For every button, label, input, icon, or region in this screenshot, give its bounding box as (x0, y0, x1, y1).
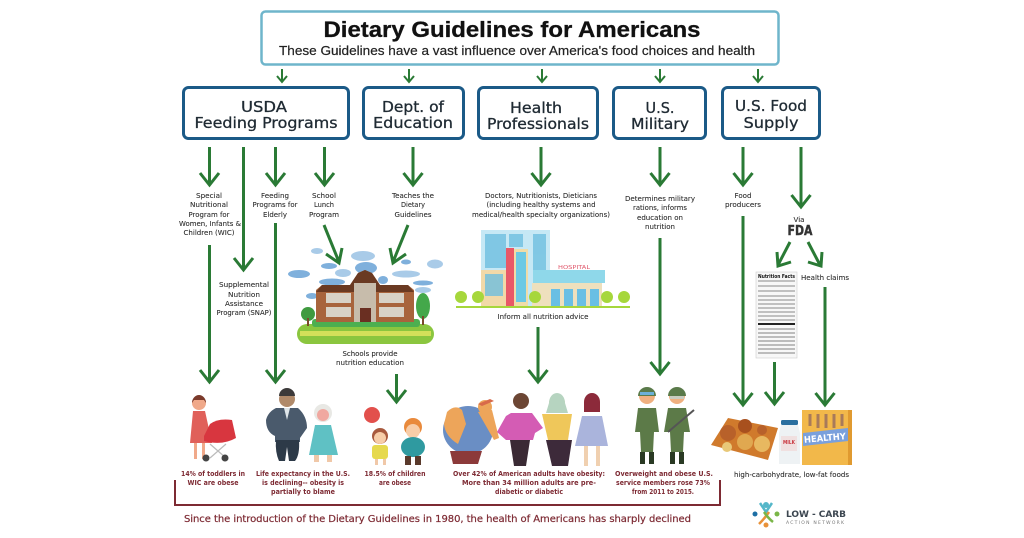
caption: life expectancy: partially to blame (271, 488, 335, 496)
logo: Low-Carb Action Network: LOW - CARB (786, 510, 846, 520)
box: USDA Feeding Programs: Feeding Programs (194, 114, 338, 132)
subtitle: These Guidelines have a vast influence over America's food choices and health (279, 43, 755, 58)
text: food producers (725, 192, 761, 209)
text: SNAP: Supplemental (219, 281, 269, 289)
text: SNAP: Nutrition (228, 291, 260, 299)
caption: service members: from 2011 to 2015. (632, 488, 694, 496)
clouds (288, 248, 443, 299)
text: elderly programs: Feeding (261, 192, 289, 200)
building (316, 270, 414, 322)
text: SNAP (216, 281, 272, 317)
box: U.S. Food Supply: U.S. Food (735, 97, 807, 115)
text: military: education on (637, 214, 683, 222)
text: schools provide: nutrition education (336, 359, 404, 367)
box: USDA Feeding Programs: USDA (241, 98, 288, 116)
text: SNAP: Assistance (225, 300, 263, 308)
box: U.S. Military (614, 88, 706, 138)
text: WIC (179, 192, 242, 237)
caption: adults: More than 34 million adults are pre- (462, 479, 596, 487)
text: WIC: Special (196, 192, 222, 200)
bracket: conclusion (175, 480, 720, 505)
caption: adults: Over 42% of American adults have obesity: (453, 470, 605, 478)
box: USDA Feeding Programs (184, 88, 348, 138)
caption: life expectancy (256, 470, 350, 496)
caption: adults (453, 470, 605, 496)
lawn (297, 324, 434, 344)
icon: mother with stroller (190, 395, 236, 462)
icon: hospital illustration (455, 230, 630, 308)
caption: children: 18.5% of children (364, 470, 426, 478)
caption: children (364, 470, 426, 487)
caption: life expectancy: Life expectancy in the U.S. (256, 470, 350, 478)
text: school lunch (309, 192, 339, 219)
caption: children: are obese (379, 479, 411, 487)
logo: Low-Carb Action Network: ACTION NETWORK (786, 520, 845, 526)
arrows: first level (200, 147, 810, 270)
text: military: rations, informs (633, 204, 687, 212)
text: high-carbohydrate foods: high-carbohydrate, low-fat foods (734, 471, 849, 479)
text: doctors: medical/health specialty organizations) (472, 211, 610, 219)
text: inform all nutrition advice: Inform all nutrition advice (498, 313, 588, 321)
text: elderly programs (252, 192, 298, 219)
caption: toddlers (181, 470, 245, 487)
text: school lunch: Lunch (314, 201, 334, 209)
icon: FDA logo: FDA (788, 224, 812, 239)
box: U.S. Food Supply: Supply (744, 114, 799, 132)
text: food producers: producers (725, 201, 761, 209)
text: schools provide: Schools provide (342, 350, 398, 358)
box: Dept. of Education: Dept. of (382, 98, 445, 116)
text: food producers: Food (734, 192, 752, 200)
icon: food tray, milk and cereal box (711, 410, 852, 465)
title: Dietary Guidelines for Americans (324, 17, 700, 42)
text: WIC: Nutritional (190, 201, 228, 209)
icon: children with balloon (364, 407, 425, 465)
text: elderly programs: Elderly (263, 211, 287, 219)
caption: service members: service members rose 73% (616, 479, 710, 487)
text: elderly programs: Programs for (252, 201, 298, 209)
logo: Low-Carb Action Network (752, 502, 846, 528)
text: via: Via (794, 216, 804, 224)
icon: soldiers (635, 387, 694, 464)
text: conclusion: Since the introduction of the Dietary Guidelines in 1980, the health of Americans has sharply declined (184, 514, 691, 525)
box: U.S. Food Supply (722, 88, 820, 138)
icon: adults with obesity (443, 393, 608, 466)
arrows: second level (200, 216, 834, 405)
text: teaches (391, 192, 434, 219)
icon: elderly couple (266, 388, 338, 462)
caption: toddlers: 14% of toddlers in (181, 470, 245, 478)
caption: service members: Overweight and obese U.S. (615, 470, 713, 478)
box: Health Professionals: Professionals (487, 115, 589, 133)
text: doctors: Doctors, Nutritionists, Dieticians (485, 192, 597, 200)
text: WIC: Children (WIC) (184, 229, 235, 237)
text: WIC: Program for (188, 211, 230, 219)
caption: service members (615, 470, 713, 496)
text: doctors: (including healthy systems and (486, 201, 596, 209)
text: teaches: Guidelines (394, 211, 432, 219)
text: teaches: Dietary (401, 201, 425, 209)
icon: school illustration (288, 248, 443, 344)
caption: toddlers: WIC are obese (188, 479, 239, 487)
text: health claims: Health claims (801, 274, 849, 282)
text: military: Determines military (625, 195, 695, 203)
icon: food tray, milk and cereal box: HEALTHY (804, 432, 847, 446)
text: doctors (472, 192, 610, 219)
text: school lunch: Program (309, 211, 339, 219)
icon: nutrition facts label (756, 272, 797, 358)
text: military: nutrition (645, 223, 675, 231)
arrows: title to categories (277, 69, 763, 82)
icon: food tray, milk and cereal box: MILK (783, 440, 796, 446)
caption: life expectancy: is declining-- obesity is (262, 479, 344, 487)
icon: hospital illustration: HOSPITAL (558, 265, 590, 271)
text: schools provide (336, 350, 404, 367)
text: WIC: Women, Infants & (179, 220, 242, 228)
text: SNAP: Program (SNAP) (216, 309, 272, 317)
box: Dept. of Education: Education (373, 114, 453, 132)
icon: nutrition facts label: Nutrition Facts (758, 274, 795, 280)
trees (301, 307, 315, 321)
text: school lunch: School (312, 192, 336, 200)
caption: adults: diabetic or diabetic (495, 488, 563, 496)
box: Health Professionals (478, 88, 598, 138)
text: teaches: Teaches the (391, 192, 434, 200)
text: military (625, 195, 695, 231)
box: Health Professionals: Health (510, 99, 562, 117)
box: U.S. Military: Military (631, 115, 689, 133)
box: Dept. of Education (364, 88, 464, 138)
box: U.S. Military: U.S. (646, 99, 674, 117)
title box (262, 12, 778, 64)
